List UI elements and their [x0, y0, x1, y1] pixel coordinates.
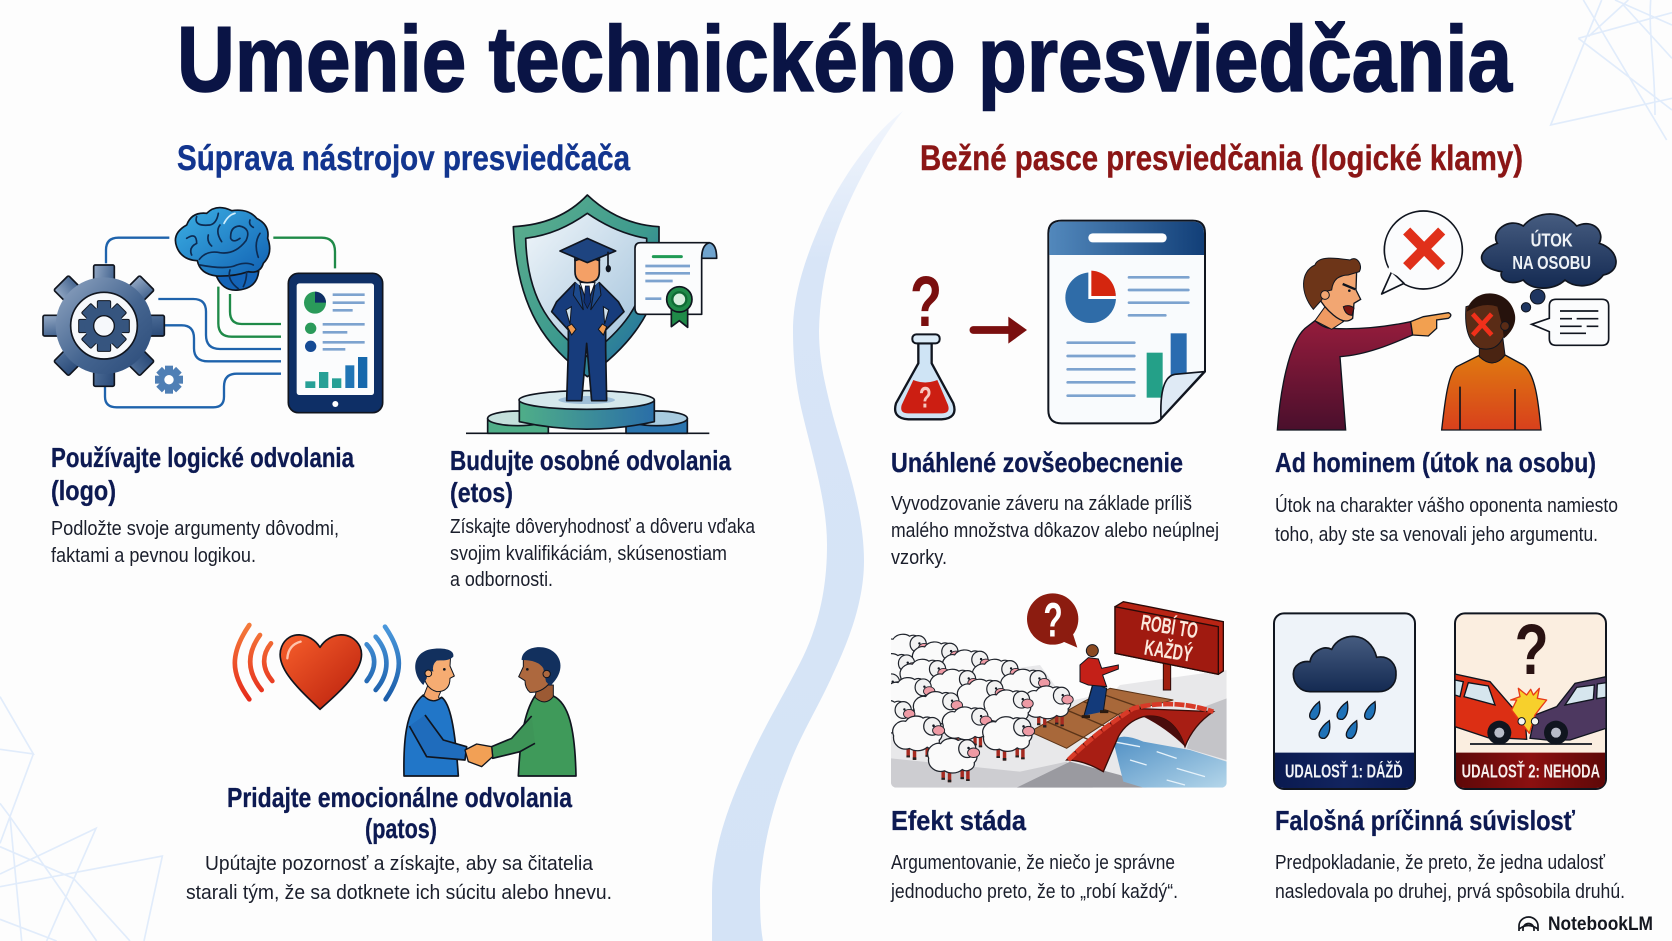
icon: sheep following across bridge: KAŽDÝ	[1143, 635, 1194, 667]
text: false cause description	[1275, 852, 1625, 903]
icon: heart and handshake	[235, 625, 576, 776]
heading: left section: Súprava nástrojov presviedčača	[177, 139, 630, 178]
text: false cause description: nasledovala po druhej, prvá spôsobila druhú.	[1275, 881, 1625, 903]
card: car crash	[1455, 610, 1606, 789]
heading: pathos: Pridajte emocionálne odvolania	[227, 782, 572, 813]
heading: ethos line 2: (etos)	[450, 477, 513, 508]
panel: pathos	[186, 625, 612, 904]
card: car crash: ?	[1515, 610, 1549, 690]
text: logos description: Podložte svoje argumenty dôvodmi,	[51, 518, 339, 540]
card: rain	[1274, 613, 1415, 789]
text: pathos description	[186, 853, 612, 904]
panel: ethos	[450, 195, 756, 591]
heading: logos line 2: (logo)	[51, 475, 116, 506]
heading: right section: Bežné pasce presviedčania (logické klamy)	[920, 139, 1523, 178]
text: ad hominem description: Útok na charakter vášho oponenta namiesto	[1275, 494, 1618, 517]
card: car crash: UDALOSŤ 2: NEHODA	[1462, 760, 1600, 781]
text: hasty generalization description	[891, 493, 1219, 569]
decorative ribbon divider	[712, 111, 903, 941]
text: logos description: faktami a pevnou logikou.	[51, 545, 256, 567]
text: ethos description: Získajte dôveryhodnosť a dôveru vďaka	[450, 516, 756, 538]
icon: flask arrow and report	[895, 221, 1205, 423]
icon: gear brain tablet	[43, 208, 383, 413]
text: hasty generalization description: Vyvodzovanie záveru na základe príliš	[891, 493, 1192, 515]
text: bandwagon description: jednoducho preto, že to „robí každý“.	[890, 881, 1178, 903]
heading: false cause: Falošná príčinná súvislosť	[1275, 805, 1575, 836]
text: bandwagon description	[890, 852, 1178, 903]
text: false cause description: Predpokladanie, že preto, že jedna udalosť	[1275, 852, 1605, 874]
heading: hasty generalization: Unáhlené zovšeobecnenie	[891, 447, 1183, 478]
heading: logos: Používajte logické odvolania	[51, 442, 354, 473]
text: ethos description: svojim kvalifikáciám, skúsenostiam	[450, 543, 727, 565]
panel: logos	[43, 208, 383, 567]
text: logos description	[51, 518, 339, 567]
decorative polygon lines top-right	[1551, 0, 1672, 140]
heading: ad hominem: Ad hominem (útok na osobu)	[1275, 447, 1596, 478]
panel: hasty generalization	[891, 221, 1219, 569]
panel: bandwagon	[854, 593, 1227, 903]
card: rain: UDALOSŤ 1: DÁŽĎ	[1285, 760, 1403, 781]
icon: rain and car crash cards	[1274, 610, 1606, 789]
icon: man pointing at person: NA OSOBU	[1512, 252, 1591, 273]
text: pathos description: starali tým, že sa dotknete ich súcitu alebo hnevu.	[186, 882, 612, 904]
text: ad hominem description: toho, aby ste sa venovali jeho argumentu.	[1275, 524, 1598, 546]
heading: pathos line 2: (patos)	[365, 813, 437, 844]
decorative polygon lines bottom-left	[0, 697, 162, 941]
heading: bandwagon: Efekt stáda	[891, 805, 1026, 836]
text: hasty generalization description: malého množstva dôkazov alebo neúplnej	[891, 520, 1219, 542]
heading: ethos: Budujte osobné odvolania	[450, 445, 731, 476]
icon: man pointing at person: ÚTOK	[1531, 230, 1573, 251]
logo: NotebookLM: NotebookLM	[1548, 914, 1653, 935]
icon: sheep following across bridge: ROBÍ TO	[1139, 610, 1200, 643]
text: ethos description: a odbornosti.	[450, 569, 553, 591]
text: pathos description: Upútajte pozornosť a získajte, aby sa čitatelia	[205, 853, 594, 875]
icon: sheep following across bridge	[854, 593, 1227, 788]
text: ad hominem description	[1275, 494, 1618, 546]
icon: man pointing at person	[1277, 211, 1616, 430]
text: hasty generalization description: vzorky.	[891, 547, 947, 569]
icon: sheep following across bridge: ?	[1043, 594, 1063, 648]
text: bandwagon description: Argumentovanie, že niečo je správne	[891, 852, 1175, 874]
icon: graduate with shield and certificate	[466, 195, 717, 433]
panel: ad hominem	[1275, 211, 1618, 546]
panel: false cause	[1274, 610, 1625, 903]
icon: flask arrow and report: ?	[910, 262, 942, 342]
text: ethos description	[450, 516, 756, 591]
icon: flask arrow and report: ?	[919, 381, 932, 414]
